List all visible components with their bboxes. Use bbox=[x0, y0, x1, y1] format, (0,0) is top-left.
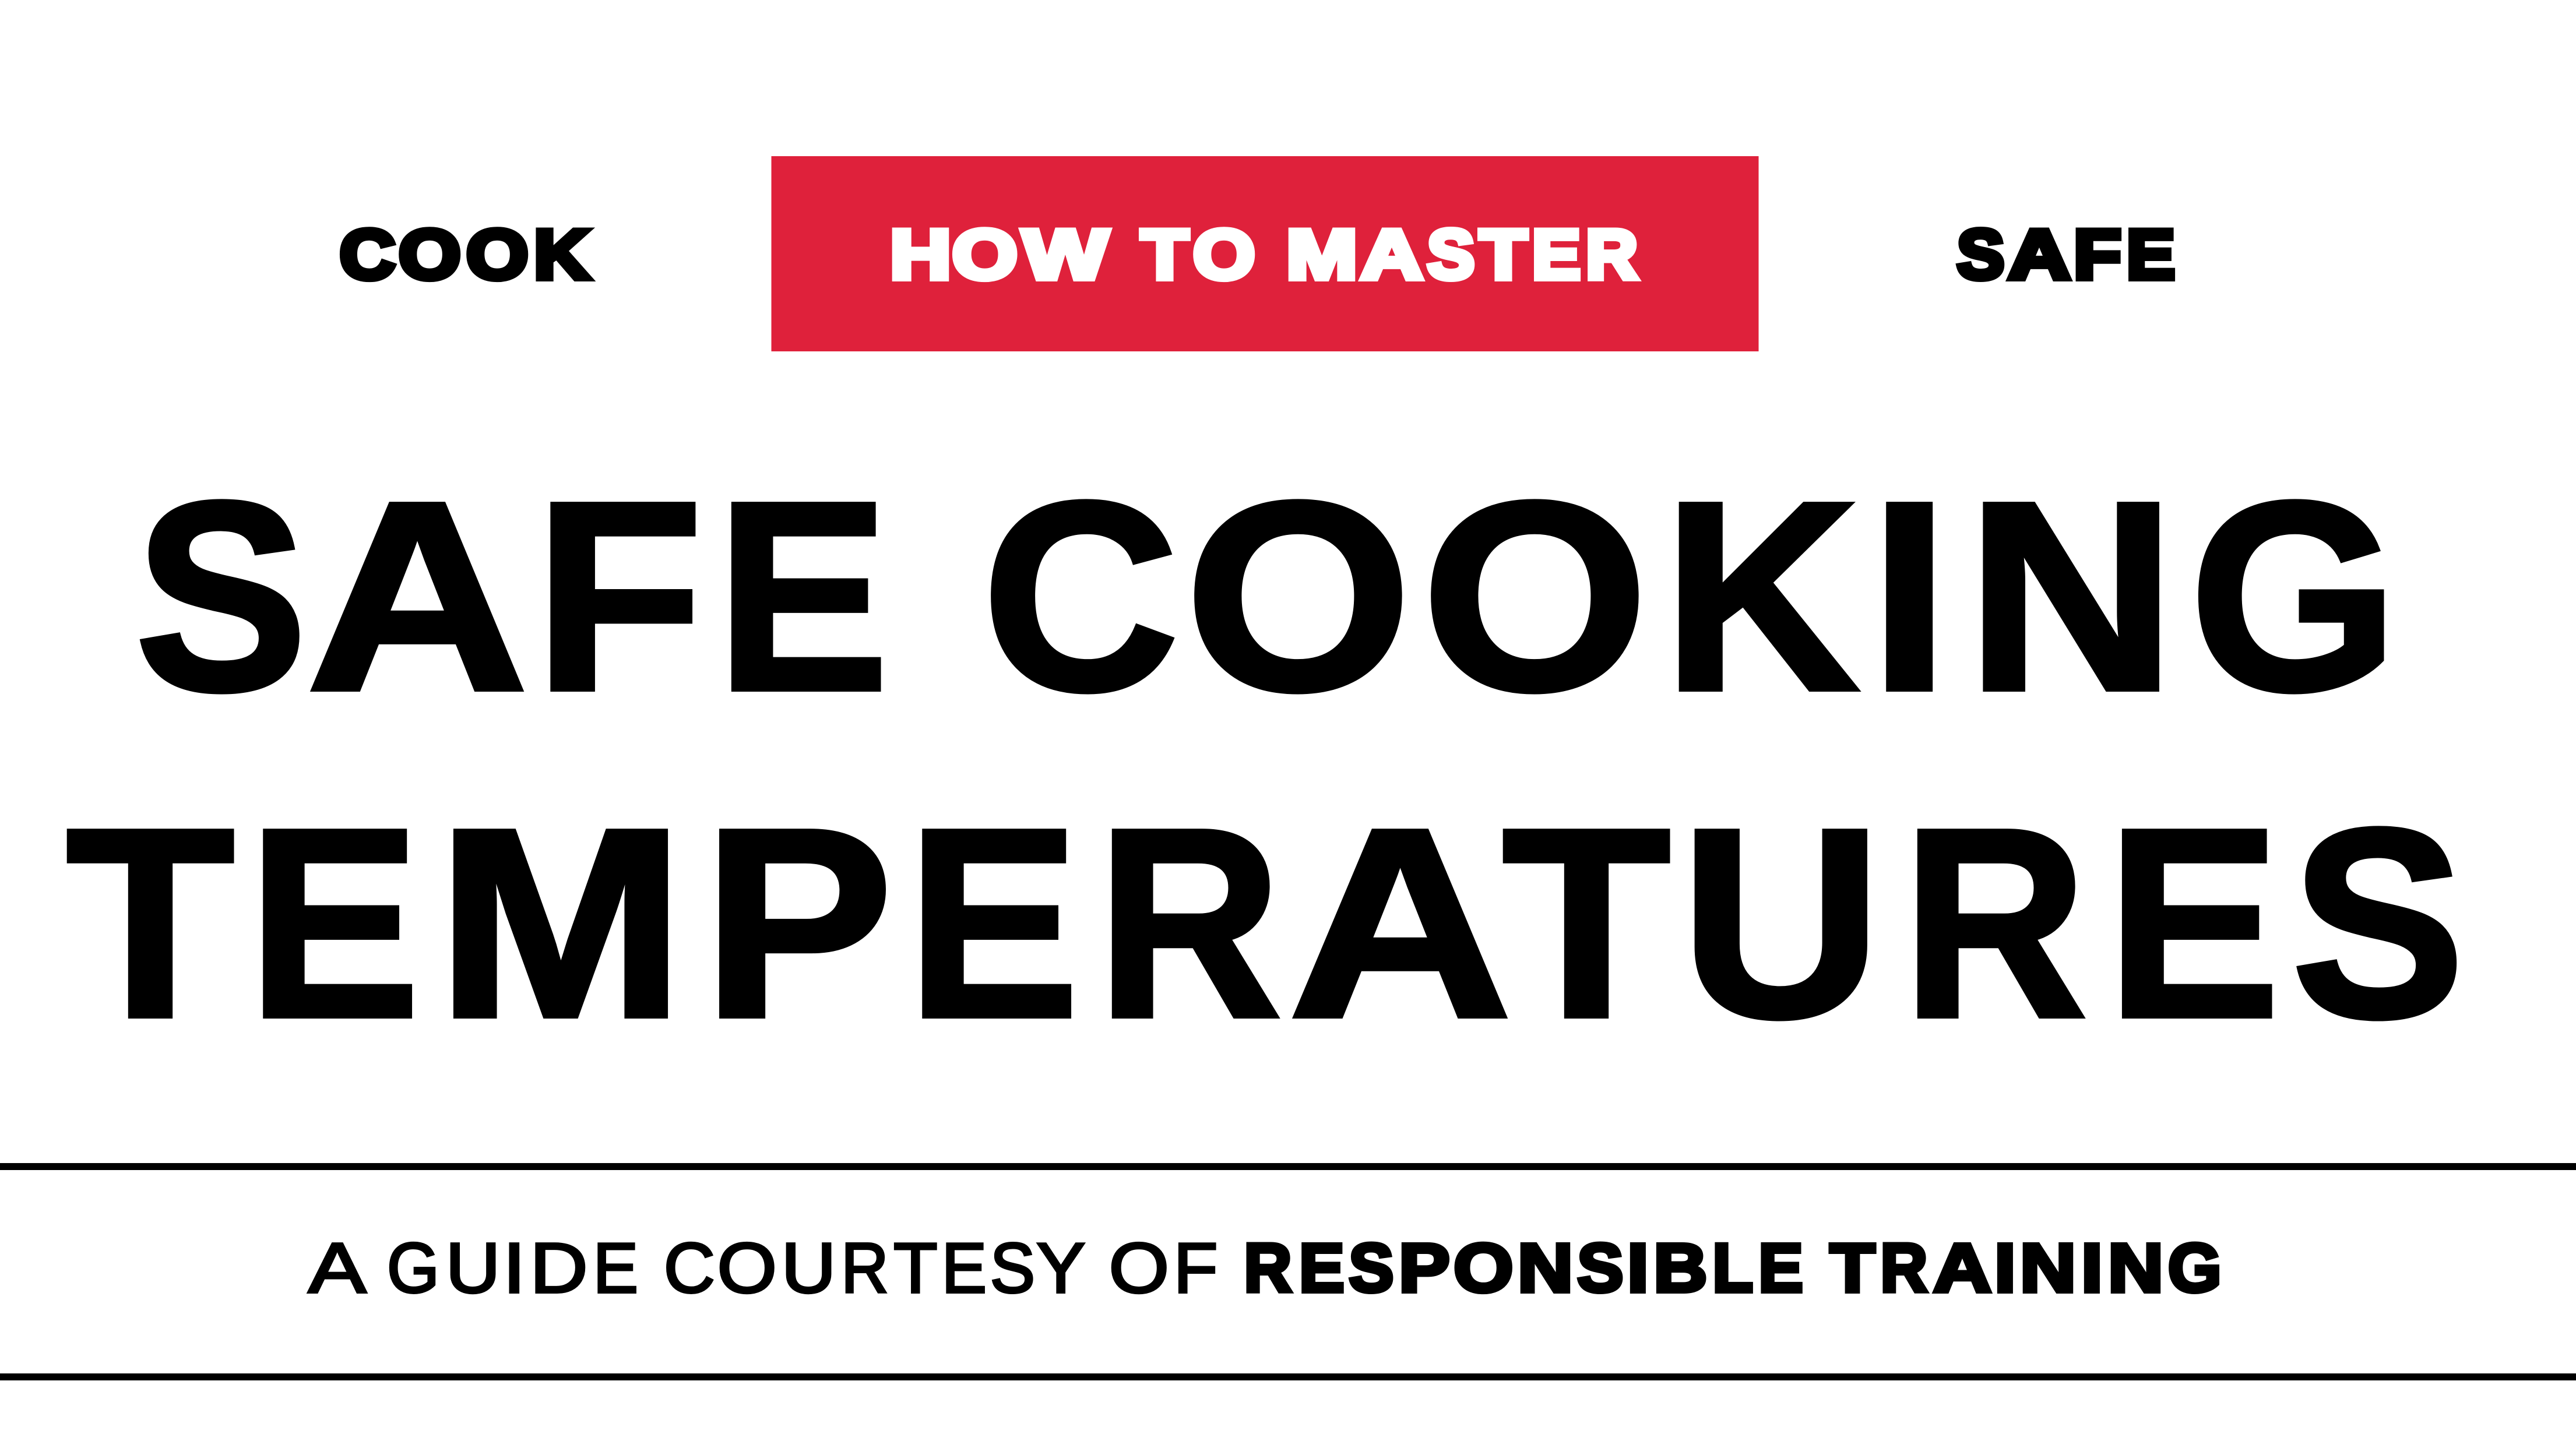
title line 1: safe cooking: I bbox=[1869, 446, 1949, 746]
credit text: a guide courtesy of: E bbox=[942, 1228, 987, 1308]
title line 2: temperatures: U bbox=[1680, 773, 1882, 1073]
credit text: responsible training: S bbox=[1349, 1229, 1394, 1306]
label: safe: F bbox=[2074, 216, 2121, 294]
credit text: responsible training: R bbox=[1244, 1229, 1291, 1306]
credit text: a guide courtesy of: C bbox=[664, 1228, 715, 1308]
credit text: responsible training: T bbox=[1830, 1229, 1875, 1306]
label: safe: A bbox=[2008, 216, 2070, 294]
credit text: a guide courtesy of: T bbox=[893, 1228, 937, 1308]
credit text: responsible training: S bbox=[1577, 1229, 1624, 1306]
banner text: how to master: W bbox=[1023, 216, 1108, 294]
banner text: how to master: O bbox=[1193, 216, 1255, 294]
title line 1: safe cooking: O bbox=[1185, 446, 1412, 746]
top divider bbox=[0, 1163, 2576, 1170]
title line 1: safe cooking: C bbox=[982, 446, 1179, 746]
title line 1: safe cooking: N bbox=[1966, 446, 2176, 746]
credit text: a guide courtesy of: F bbox=[1174, 1228, 1218, 1308]
top banner: how to master cook safe bbox=[340, 156, 2175, 351]
title line 2: temperatures: A bbox=[1288, 773, 1512, 1073]
title line 1: safe cooking: K bbox=[1663, 446, 1859, 746]
credit text: a guide courtesy of: U bbox=[782, 1228, 836, 1308]
label: cook: O bbox=[399, 216, 460, 294]
title line 1: safe cooking: E bbox=[716, 446, 889, 746]
banner text: how to master: T bbox=[1480, 216, 1527, 294]
title line 1: safe cooking: O bbox=[1421, 446, 1648, 746]
banner text: how to master: H bbox=[890, 216, 951, 294]
credit text: responsible training: G bbox=[2168, 1229, 2222, 1306]
credit text: a guide courtesy of: O bbox=[717, 1228, 777, 1308]
credit text: responsible training: I bbox=[1994, 1229, 2016, 1306]
credit text: responsible training: E bbox=[1299, 1229, 1345, 1306]
title line 2: temperatures: M bbox=[436, 773, 685, 1073]
credit text: a guide courtesy of: S bbox=[990, 1228, 1035, 1308]
credit line bbox=[308, 1228, 2222, 1308]
credit text: a guide courtesy of: U bbox=[446, 1228, 500, 1308]
credit text: responsible training: N bbox=[2020, 1229, 2076, 1306]
banner text: how to master: M bbox=[1286, 216, 1357, 294]
title line 2: temperatures: S bbox=[2292, 773, 2465, 1073]
banner text: how to master: O bbox=[952, 216, 1018, 294]
credit text: a guide courtesy of: E bbox=[593, 1228, 638, 1308]
title line 2: temperatures: E bbox=[248, 773, 420, 1073]
credit text: a guide courtesy of: Y bbox=[1036, 1228, 1084, 1308]
credit text: responsible training: N bbox=[1518, 1229, 1573, 1306]
banner text: how to master: T bbox=[1141, 216, 1188, 294]
credit text: responsible training: I bbox=[1627, 1229, 1649, 1306]
credit text: a guide courtesy of: R bbox=[841, 1228, 888, 1308]
title line 2: temperatures: P bbox=[703, 773, 893, 1073]
credit text: responsible training: B bbox=[1653, 1229, 1708, 1306]
banner text: how to master: R bbox=[1586, 216, 1638, 294]
title line 1: safe cooking: A bbox=[306, 446, 529, 746]
banner text: how to master: S bbox=[1427, 216, 1474, 294]
bottom divider bbox=[0, 1373, 2576, 1380]
label: cook: K bbox=[534, 216, 590, 294]
credit text: a guide courtesy of: G bbox=[387, 1228, 439, 1308]
credit text: responsible training: E bbox=[1758, 1229, 1803, 1306]
credit text: responsible training: O bbox=[1454, 1229, 1514, 1306]
title line 1: safe cooking: S bbox=[135, 446, 307, 746]
title line 2: temperatures: R bbox=[1097, 773, 1282, 1073]
title line 2: temperatures: T bbox=[1502, 773, 1670, 1073]
main title bbox=[66, 446, 2465, 1073]
title line 2: temperatures: R bbox=[1902, 773, 2087, 1073]
label: safe: S bbox=[1957, 216, 2004, 294]
credit text: responsible training: A bbox=[1933, 1229, 1991, 1306]
title line 2: temperatures: E bbox=[2107, 773, 2280, 1073]
title line 2: temperatures: E bbox=[907, 773, 1079, 1073]
title line 1: safe cooking: F bbox=[534, 446, 703, 746]
banner text: how to master: E bbox=[1532, 216, 1581, 294]
credit text: a guide courtesy of: D bbox=[530, 1228, 588, 1308]
credit text: responsible training: N bbox=[2108, 1229, 2163, 1306]
credit text: a guide courtesy of: O bbox=[1109, 1228, 1169, 1308]
label: cook: C bbox=[340, 216, 395, 294]
label: cook: O bbox=[466, 216, 528, 294]
credit text: a guide courtesy of: I bbox=[503, 1228, 526, 1308]
credit text: responsible training: I bbox=[2081, 1229, 2103, 1306]
credit text: responsible training: P bbox=[1399, 1229, 1450, 1306]
credit text: a guide courtesy of: A bbox=[308, 1228, 367, 1308]
credit text: responsible training: L bbox=[1712, 1229, 1753, 1306]
credit text: responsible training: R bbox=[1880, 1229, 1928, 1306]
title line 2: temperatures: T bbox=[66, 773, 234, 1073]
title line 1: safe cooking: G bbox=[2190, 446, 2398, 746]
banner text: how to master: A bbox=[1361, 216, 1423, 294]
label: safe: E bbox=[2127, 216, 2175, 294]
red banner bbox=[772, 156, 1759, 351]
